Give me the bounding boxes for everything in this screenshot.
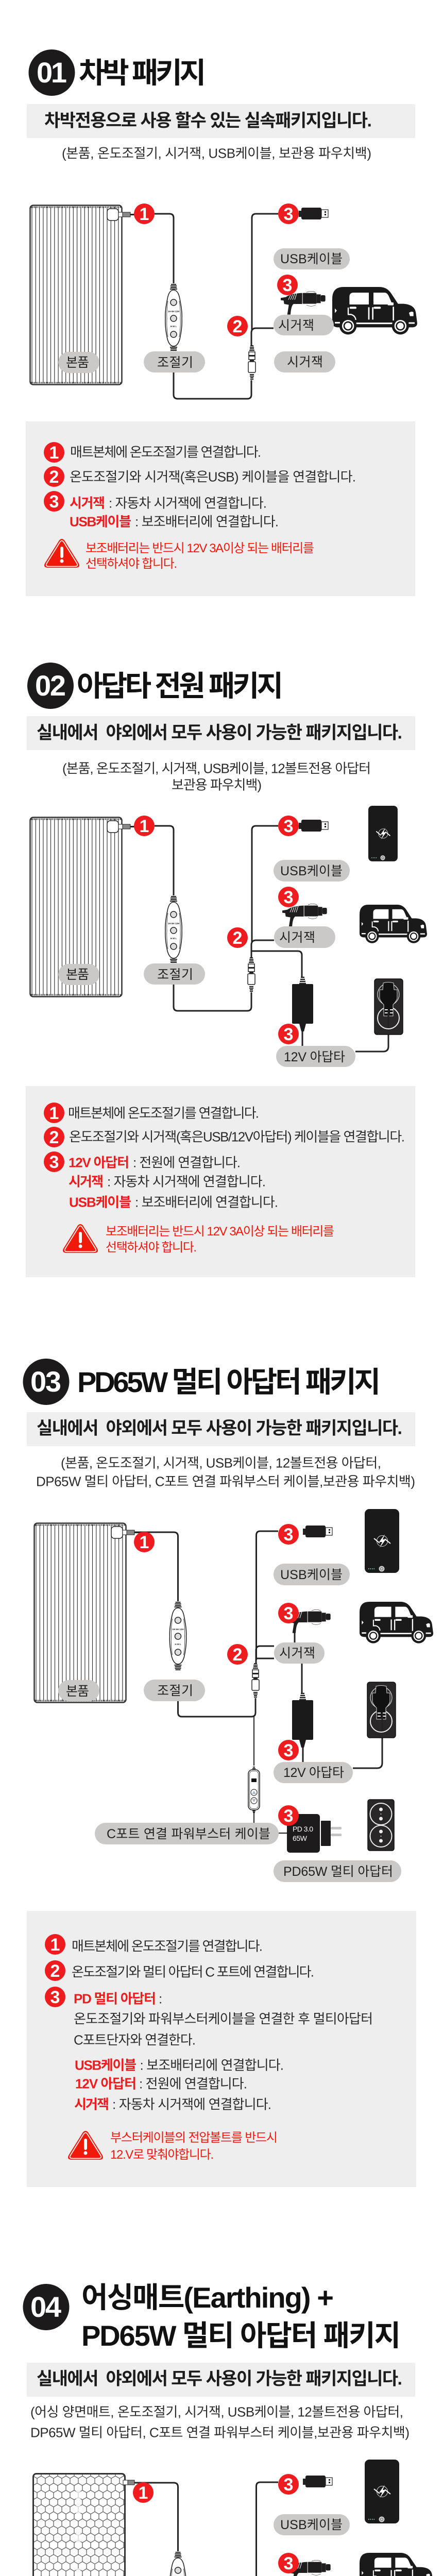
cigar jack plug — [281, 291, 326, 315]
step badge 3 PD adapter: 3 — [284, 1806, 293, 1826]
step 2: 온도조절기와 시거잭(혹은USB) 케이블을 연결합니다. — [70, 469, 356, 484]
step badge 3 adapter: 3 — [284, 1741, 293, 1760]
icon: car — [360, 905, 427, 943]
section 04: earthing mat plus PD65W multi adapter package — [23, 2281, 433, 2576]
instructions panel 1 — [26, 421, 415, 596]
step badge 2: 2 — [233, 1645, 242, 1665]
label: 12V adapter — [274, 1762, 353, 1783]
label: usb cable: USB케이블 — [280, 2518, 343, 2532]
connection diagram 4 — [33, 2460, 433, 2576]
label: usb cable — [274, 1564, 350, 1585]
heading — [81, 2281, 401, 2352]
step badge 3 usb: 3 — [284, 2475, 293, 2495]
step 2 — [45, 1960, 314, 1981]
label: body: 본품 — [66, 1684, 89, 1699]
step 3: PD 멀티 아답터 — [74, 1991, 156, 2006]
label: controller — [144, 963, 205, 985]
warning: 부스터케이블의 전압볼트를 반드시 — [110, 2131, 278, 2145]
number badge 04 — [23, 2284, 69, 2330]
step 3: : 자동차 시거잭에 연결합니다. — [112, 2097, 271, 2112]
label: cigar jack lower: 시거잭 — [287, 355, 323, 369]
icon: wall outlet with plug — [367, 1682, 396, 1738]
step badge 2 — [227, 316, 248, 336]
number badge 03 — [23, 1359, 69, 1405]
connection diagram 3 — [34, 1509, 433, 1882]
temperature controller — [165, 284, 182, 352]
step badge 3 cigar jack: 3 — [284, 1604, 293, 1623]
section 02: adapter power package — [26, 663, 427, 1277]
step badge 3 usb — [278, 204, 299, 224]
step badge 3 cigar jack — [277, 275, 298, 295]
cigar jack plug — [282, 904, 327, 927]
subtitle band: 실내에서 야외에서 모두 사용이 가능한 패키지입니다. — [37, 723, 402, 743]
subtitle band — [27, 104, 415, 138]
step 2: 2 — [49, 1128, 59, 1147]
temperature controller — [165, 896, 182, 964]
step 3: 3 — [49, 1153, 59, 1172]
heading: PD65W 멀티 아답터 패키지 — [81, 2319, 401, 2352]
mat body — [30, 205, 122, 384]
contents list: (본품, 온도조절기, 시거잭, USB케이블, 보관용 파우치백) — [62, 145, 371, 161]
icon: wall outlet — [368, 1800, 394, 1851]
step badge 3 usb: 3 — [284, 1525, 293, 1545]
step badge 3 cigar jack — [278, 2553, 299, 2573]
inline connector — [248, 958, 255, 991]
step badge 3 adapter — [278, 1740, 299, 1760]
step badge 3 cigar jack: 3 — [284, 2554, 293, 2573]
step badge 3 cigar jack: 3 — [284, 888, 293, 907]
label: controller: 조절기 — [157, 1684, 193, 1698]
subtitle band: 실내에서 야외에서 모두 사용이 가능한 패키지입니다. — [37, 1419, 402, 1438]
step 3: USB케이블 — [75, 2058, 137, 2073]
step badge 3 usb: 3 — [284, 817, 293, 836]
step 1: 1 — [49, 443, 59, 463]
step badge 3 adapter — [278, 1024, 299, 1044]
step 3: : 보조배터리에 연결합니다. — [135, 514, 279, 530]
step 3: : 전원에 연결합니다. — [133, 1155, 241, 1171]
step badge 3 adapter: 3 — [284, 1025, 293, 1044]
step 3: 3 — [49, 492, 59, 512]
step 3: USB케이블 — [70, 514, 131, 530]
step badge 2 — [227, 1644, 248, 1665]
label: C-port booster cable: C포트 연결 파워부스터 케이블 — [107, 1827, 270, 1841]
subtitle band: 차박전용으로 사용 할수 있는 실속패키지입니다. — [44, 111, 372, 131]
step 3: : — [159, 1991, 162, 2006]
step badge 3 usb: 3 — [284, 205, 293, 224]
number badge 02 — [27, 663, 74, 709]
step 3: 12V 아답터 — [75, 2076, 137, 2092]
connection diagram 1 — [30, 204, 417, 399]
step 3: USB케이블 — [69, 1194, 131, 1210]
warning: 12.V로 맞춰야합니다. — [110, 2148, 214, 2162]
cigar jack plug — [286, 2560, 331, 2576]
contents list: 보관용 파우치백) — [172, 777, 262, 792]
label: usb cable: USB케이블 — [280, 252, 343, 266]
contents list: DP65W 멀티 아답터, C포트 연결 파워부스터 케이블,보관용 파우치백) — [36, 1473, 415, 1489]
step badge 1 — [134, 1532, 155, 1552]
PD65W multi adapter — [287, 1814, 342, 1853]
warning — [44, 539, 314, 571]
step 1: 매트본체에 온도조절기를 연결합니다. — [72, 1938, 263, 1954]
step badge 3 PD adapter — [278, 1805, 299, 1826]
label: C-port booster cable — [95, 1823, 279, 1844]
label: controller: 조절기 — [157, 355, 193, 370]
usb plug — [299, 208, 328, 219]
step 1: 1 — [50, 1935, 60, 1955]
step 3: 3 — [50, 1988, 60, 2007]
icon: car — [332, 287, 417, 334]
label: body: 본품 — [66, 968, 89, 982]
step badge 3 usb — [278, 2474, 299, 2495]
12V adapter — [292, 1693, 313, 1748]
contents list — [62, 760, 371, 792]
PD65W multi adapter: 65W — [293, 1834, 308, 1842]
section 03: PD65W multi adapter package — [23, 1359, 433, 2187]
label: usb cable: USB케이블 — [280, 864, 343, 878]
step 2 — [44, 466, 356, 487]
step badge 3 usb — [278, 816, 299, 836]
subtitle band: 실내에서 야외에서 모두 사용이 가능한 패키지입니다. — [37, 2369, 402, 2388]
mat connector — [107, 209, 135, 221]
contents list — [36, 1455, 415, 1489]
label: cigar jack upper — [274, 315, 334, 335]
mat connector — [111, 1527, 139, 1538]
warning — [63, 1224, 334, 1255]
step badge 1: 1 — [140, 817, 149, 836]
step 1: 매트본체에 온도조절기를 연결합니다. — [68, 1106, 259, 1121]
connection diagram 2 — [30, 806, 427, 1067]
step 1: 매트본체에 온도조절기를 연결합니다. — [70, 444, 261, 460]
warning: 보조배터리는 반드시 12V 3A이상 되는 배터리를 — [86, 541, 314, 555]
number badge 01: 01 — [37, 56, 67, 89]
temperature controller — [169, 1602, 186, 1670]
step badge 1: 1 — [140, 1533, 149, 1552]
step 3 — [44, 1151, 278, 1210]
icon: car — [360, 2553, 433, 2576]
label: cigar jack lower — [274, 351, 335, 372]
heading: PD65W 멀티 아답터 패키지 — [77, 1366, 381, 1398]
label: cigar jack — [274, 926, 335, 948]
step 3: : 전원에 연결합니다. — [139, 2076, 247, 2092]
label: usb cable: USB케이블 — [280, 1568, 343, 1582]
step 2 — [44, 1127, 405, 1147]
step badge 1 — [133, 2482, 154, 2503]
label: PD65W multi adapter: PD65W 멀티 아답터 — [283, 1865, 393, 1879]
contents list: (본품, 온도조절기, 시거잭, USB케이블, 12볼트전용 아답터, — [61, 1455, 381, 1470]
mat body — [34, 1523, 126, 1702]
step 3: 시거잭 — [74, 2097, 109, 2112]
step 1 — [44, 442, 261, 463]
icon: power bank — [365, 2460, 399, 2523]
cigar jack plug — [286, 1609, 331, 1633]
heading: 어싱매트(Earthing) + — [81, 2281, 334, 2314]
step badge 3 cigar jack — [278, 1603, 299, 1623]
usb plug — [299, 820, 328, 832]
number badge 01 — [29, 49, 75, 96]
inline connector — [252, 1664, 259, 1697]
heading: 아답타 전원 패키지 — [77, 670, 283, 702]
step badge 3 usb — [278, 1524, 299, 1545]
warning: 선택하셔야 합니다. — [106, 1241, 197, 1255]
label: cigar jack upper: 시거잭 — [278, 318, 314, 333]
step badge 3 cigar jack — [278, 887, 299, 907]
contents list — [30, 2404, 410, 2440]
heading: 차박 패키지 — [79, 57, 206, 89]
label: cigar jack: 시거잭 — [279, 1646, 315, 1660]
step badge 2 — [227, 927, 248, 948]
icon: power bank — [365, 1509, 399, 1573]
step 3: : 자동차 시거잭에 연결합니다. — [109, 496, 267, 511]
step badge 1: 1 — [139, 2483, 148, 2503]
label: 12V adapter: 12V 아답타 — [283, 1766, 344, 1780]
step badge 1: 1 — [140, 205, 149, 224]
instructions panel 2 — [26, 1086, 415, 1277]
label: body: 본품 — [66, 355, 89, 370]
label: body — [58, 352, 99, 373]
warning — [68, 2131, 278, 2162]
step 3: : 자동차 시거잭에 연결합니다. — [107, 1174, 266, 1189]
step 3: : 보조배터리에 연결합니다. — [140, 2058, 284, 2073]
inline connector — [248, 346, 255, 379]
label: usb cable — [274, 248, 350, 269]
step badge 2: 2 — [233, 317, 242, 336]
step 1 — [45, 1934, 263, 1955]
usb plug — [303, 1526, 332, 1537]
label: 12V adapter — [276, 1046, 355, 1067]
usb plug — [303, 2476, 332, 2487]
step 3: 시거잭 — [70, 496, 105, 511]
step 1 — [44, 1103, 259, 1123]
temperature controller — [169, 2552, 186, 2576]
label: controller — [144, 1680, 205, 1701]
subtitle band — [27, 1412, 415, 1446]
number badge 02: 02 — [35, 669, 66, 702]
label: cigar jack: 시거잭 — [279, 930, 315, 945]
contents list: (어싱 양면매트, 온도조절기, 시거잭, USB케이블, 12볼트전용 아답터, — [30, 2404, 403, 2419]
label: cigar jack — [274, 1642, 325, 1664]
step 2: 2 — [49, 467, 59, 487]
mat body — [30, 817, 122, 996]
contents list: DP65W 멀티 아답터, C포트 연결 파워부스터 케이블,보관용 파우치백) — [30, 2425, 410, 2440]
label: PD65W multi adapter — [274, 1860, 401, 1882]
step 3: : 보조배터리에 연결합니다. — [135, 1194, 278, 1210]
step 3 — [44, 491, 279, 530]
label: usb cable — [274, 860, 350, 882]
step badge 1 — [134, 816, 155, 836]
mat connector — [123, 2480, 134, 2485]
step badge 3 cigar jack: 3 — [283, 276, 292, 295]
instructions panel 3 — [27, 1911, 416, 2187]
step 2: 2 — [50, 1961, 60, 1981]
icon: power bank — [368, 806, 398, 861]
step 3 — [45, 1987, 373, 2112]
step badge 2: 2 — [233, 928, 242, 948]
mat connector — [107, 821, 135, 833]
label: 12V adapter: 12V 아답타 — [284, 1050, 345, 1064]
label: controller: 조절기 — [157, 968, 193, 982]
honeycomb earthing mat body — [33, 2474, 125, 2576]
section 01: car camping package — [26, 49, 417, 596]
power booster controller — [248, 1767, 260, 1812]
PD65W multi adapter: PD 3.0 — [293, 1825, 313, 1833]
label: body — [58, 1680, 99, 1701]
step 3: 12V 아답터 — [69, 1155, 129, 1171]
step 2: 온도조절기와 시거잭(혹은USB/12V아답터) 케이블을 연결합니다. — [69, 1129, 405, 1145]
12V adapter — [292, 977, 313, 1031]
number badge 04: 04 — [30, 2291, 61, 2323]
contents list: (본품, 온도조절기, 시거잭, USB케이블, 12볼트전용 아답터 — [62, 760, 371, 776]
step 1: 1 — [49, 1104, 59, 1123]
label: usb cable — [274, 2514, 350, 2535]
number badge 03: 03 — [30, 1365, 61, 1398]
step 3: 시거잭 — [69, 1174, 104, 1189]
icon: car — [360, 1602, 433, 1643]
step badge 1 — [134, 204, 155, 224]
warning: 보조배터리는 반드시 12V 3A이상 되는 배터리를 — [106, 1225, 334, 1239]
label: body — [58, 964, 99, 985]
step 2: 온도조절기와 멀티 아답터 C 포트에 연결합니다. — [72, 1964, 314, 1979]
subtitle band — [27, 2363, 415, 2397]
icon: wall outlet with plug — [374, 979, 403, 1035]
step 3: 온도조절기와 파워부스터케이블을 연결한 후 멀티아답터 — [74, 2011, 373, 2027]
subtitle band — [27, 716, 415, 750]
warning: 선택하셔야 합니다. — [86, 557, 177, 571]
step 3: C포트단자와 연결한다. — [74, 2032, 196, 2047]
label: controller — [144, 351, 205, 372]
